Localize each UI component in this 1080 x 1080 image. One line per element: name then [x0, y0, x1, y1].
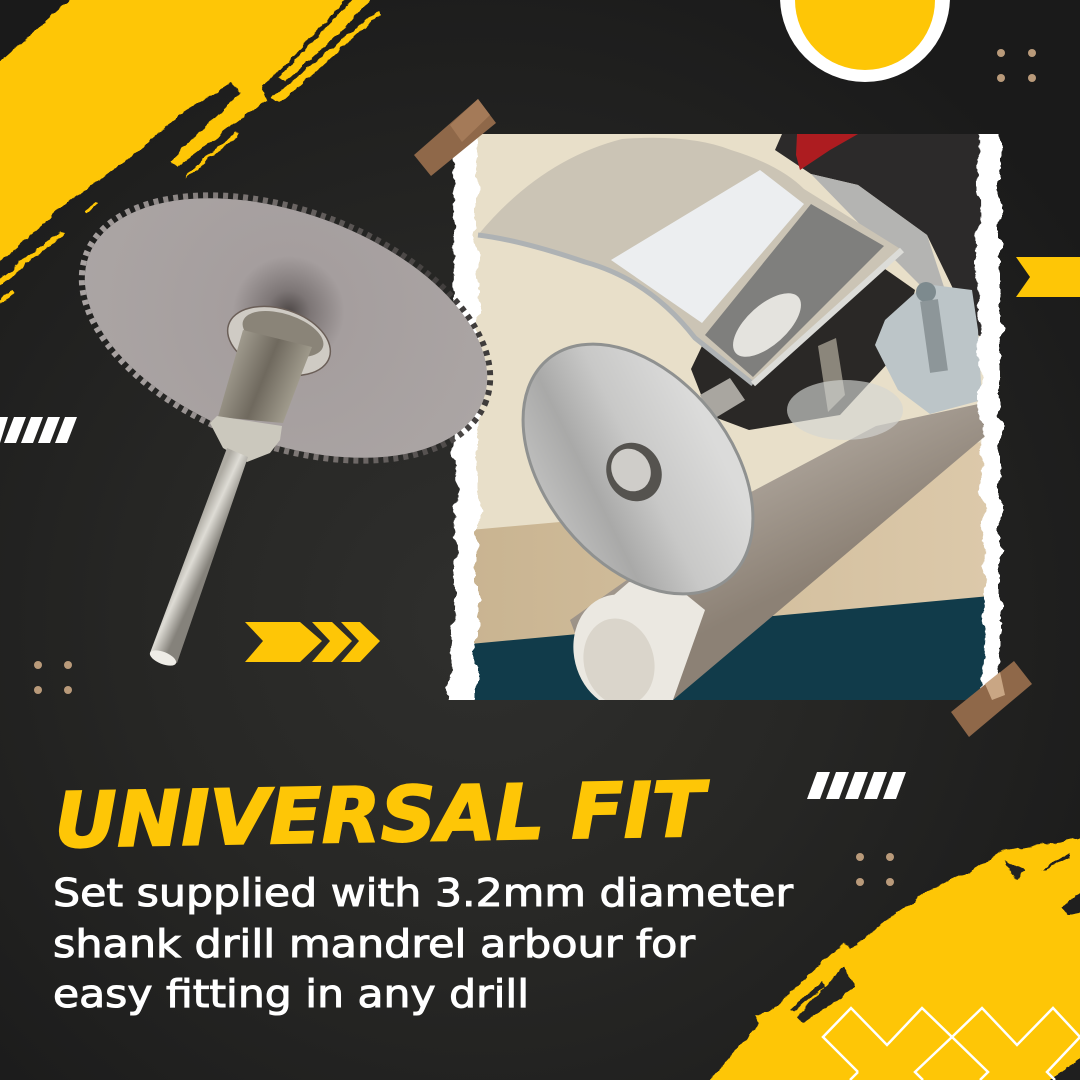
brush stroke: bottom right: [700, 835, 1080, 1080]
silver disc: [522, 342, 754, 596]
tape: top of photo: [414, 99, 496, 176]
blade disc: [49, 148, 523, 508]
black foam drill body: [775, 134, 990, 340]
clamp and bolt: [875, 282, 982, 414]
description text: Set supplied with 3.2mm diameter: [53, 871, 793, 915]
torn paper edges: [447, 120, 1000, 720]
description text: shank drill mandrel arbour for: [53, 922, 695, 966]
mandrel neck: [210, 416, 282, 462]
mandrel collar: [218, 330, 312, 423]
dark chuck: [691, 269, 915, 430]
white pipe end: [573, 582, 705, 700]
torn edge: left: [447, 120, 477, 720]
product: saw blade on mandrel: [45, 144, 527, 669]
drill chuck collar: [811, 174, 945, 290]
torn edge: right: [978, 120, 1000, 720]
stripes: left: [0, 417, 77, 443]
red drill detail: [796, 134, 858, 170]
blade teeth: [45, 144, 527, 512]
tape: bottom of photo: [951, 661, 1032, 737]
arrows: chevrons: [245, 622, 380, 662]
wood skirting: [470, 440, 990, 645]
dots: lower right: [856, 853, 894, 886]
title: UNIVERSAL FIT: [54, 765, 710, 865]
brush stroke: top left: [0, 0, 380, 304]
dots: left: [34, 661, 72, 694]
chuck band: [818, 338, 845, 412]
head ring: [237, 302, 329, 366]
stripes: lower right: [807, 772, 906, 799]
mandrel head: [219, 294, 339, 388]
disc hub: [606, 442, 662, 502]
clear blade guard: [478, 138, 902, 384]
shank tip: [148, 647, 178, 669]
pipe opening: [584, 618, 654, 700]
grey pipe: [570, 403, 990, 700]
photo backdrop: wall: [472, 134, 985, 530]
pattern: white zigzag lines: [823, 1008, 1080, 1080]
teal floor: [470, 596, 990, 700]
description text: [53, 871, 793, 1016]
lower clear lobe: [787, 380, 903, 440]
description text: easy fitting in any drill: [53, 972, 529, 1016]
arrow: right edge: [1016, 257, 1080, 297]
mandrel shank: [150, 448, 248, 663]
photo: blade cutting pipe: [447, 120, 1000, 720]
circle: top badge: [780, 0, 950, 82]
shaft: [700, 378, 745, 420]
dots: top right: [997, 49, 1036, 82]
